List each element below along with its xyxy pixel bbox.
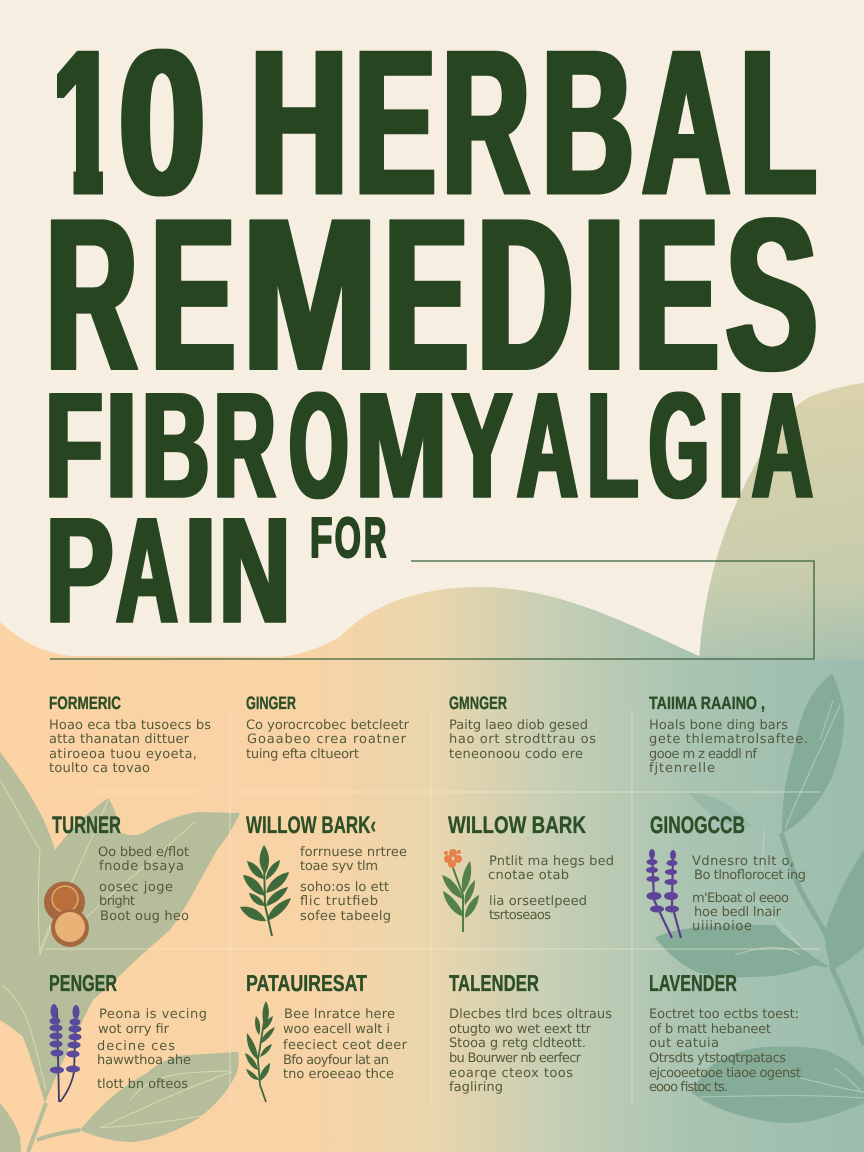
card: Ginger: Co yorocrcobec betcleetr (246, 718, 410, 733)
card: Talender: TALENDER (449, 970, 539, 996)
title line: FIBROMYALGIA: B (142, 361, 209, 529)
card: Willow Bark fern (240, 812, 407, 936)
title line: FIBROMYALGIA: R (214, 361, 276, 529)
title line: FIBROMYALGIA: G (649, 361, 709, 529)
card: Willow Bark fern: WILLOW BARK‹ (246, 812, 376, 839)
card: Ginogccb (646, 812, 806, 938)
icon: turmeric roots (44, 882, 89, 947)
card: Talender: fagliring (449, 1080, 503, 1095)
title line: FIBROMYALGIA: A (752, 361, 813, 529)
card: Ginger: Goaabeo crea roatner (247, 732, 407, 747)
title line: PAIN: A (116, 486, 178, 654)
title line: 10 HERBAL: H (250, 8, 348, 238)
title line: PAIN: N (219, 486, 290, 654)
card: Lavender: out eatuia (649, 1036, 719, 1051)
title line: REMEDIES: E (634, 173, 719, 415)
title line: 10 HERBAL: R (442, 8, 529, 238)
card: Formeric: atta thanatan dittuer (49, 732, 190, 747)
card: Ginogccb: uiiinoioe (692, 919, 752, 934)
card: Gmnger: Paitg laeo diob gesed (449, 718, 588, 733)
card: Willow Bark fern: soho:os lo ett (300, 880, 389, 895)
title line: FIBROMYALGIA: F (45, 361, 103, 529)
card: Taiima Raaino: gooe m z eaddl nf (649, 747, 757, 762)
card: Willow Bark fern: toae syv tlm (300, 859, 378, 874)
title word: FOR: R (364, 507, 387, 570)
card: Penger (49, 970, 207, 1102)
card: Gmnger (449, 693, 596, 762)
card: Patauiresat: tno eroeeao thce (283, 1067, 394, 1082)
card: Patauiresat: woo eacell walt i (283, 1022, 390, 1037)
icon: herb sprig (245, 1001, 275, 1102)
title line: 10 HERBAL: E (355, 8, 435, 238)
card: Taiima Raaino: fjtenrelle (649, 761, 715, 776)
title line: FIBROMYALGIA: M (355, 361, 447, 529)
card: Talender: eoarqe cteox toos (449, 1066, 573, 1081)
card: Gmnger: teneonoou codo ere (449, 747, 583, 762)
card: Gmnger: hao ort strodttrau os (449, 732, 596, 747)
card: Willow Bark flower: cnotae otab (488, 868, 569, 883)
card: Formeric: atiroeoa tuou eyoeta, (49, 747, 197, 762)
title line: 10 HERBAL: 1 (53, 8, 117, 238)
card: Willow Bark flower: WILLOW BARK (448, 812, 587, 839)
card: Lavender (649, 970, 801, 1095)
title line: REMEDIES: E (151, 173, 235, 415)
title line: PAIN: I (184, 486, 217, 654)
card: Formeric: FORMERIC (49, 693, 121, 713)
card: Penger: decine ces (97, 1039, 175, 1054)
title frame line (50, 561, 814, 659)
row 3 cards (49, 970, 801, 1102)
card: Turner (44, 812, 189, 947)
card: Patauiresat: Bee lnratce here (284, 1007, 395, 1022)
title line: REMEDIES: R (46, 173, 137, 415)
card: Lavender: eooo fistoc ts. (649, 1080, 728, 1095)
title line: FIBROMYALGIA: Y (452, 361, 512, 529)
card: Talender: bu Bourwer nb eerfecr (449, 1051, 582, 1066)
card: Formeric: toulto ca tovao (49, 761, 150, 776)
title line: REMEDIES: E (385, 173, 468, 415)
card: Willow Bark flower (442, 812, 614, 932)
card: Lavender: ejcooeetooe tiaoe ogenst (649, 1066, 801, 1081)
title line: FIBROMYALGIA: O (289, 361, 348, 529)
icon: fern (240, 845, 291, 936)
card: Patauiresat: Bfo aoyfour lat an (283, 1053, 389, 1068)
grid lines (45, 710, 820, 1103)
card: Taiima Raaino: Hoals bone ding bars (649, 718, 788, 733)
card: Taiima Raaino: TAIIMA RAAINO , (649, 693, 765, 713)
card: Talender: Stooa g retg cldteott. (449, 1036, 586, 1051)
card: Patauiresat: PATAUIRESAT (246, 970, 367, 996)
card: Ginogccb: m'Eboat ol eeoo (692, 891, 789, 906)
row 1 cards (49, 693, 808, 776)
card: Talender (449, 970, 612, 1095)
card: Penger: hawwthoa ahe (97, 1053, 191, 1068)
card: Ginogccb: Vdnesro tnlt o, (692, 854, 794, 869)
title (45, 8, 817, 654)
card: Penger: wot orry fir (98, 1022, 170, 1037)
title line: REMEDIES: I (582, 173, 626, 415)
icon: flowering sprig (442, 849, 479, 932)
card: Turner: bright (99, 894, 135, 909)
card: Lavender: of b matt hebaneet (649, 1022, 771, 1037)
title line: FIBROMYALGIA: A (517, 361, 578, 529)
card: Penger: Peona is vecing (99, 1007, 207, 1022)
card: Turner: Boot oug heo (100, 909, 189, 924)
card: Turner: Oo bbed e/flot (98, 845, 189, 860)
card: Ginogccb: hoe bedl lnair (694, 905, 782, 920)
title line: 10 HERBAL: L (740, 8, 816, 238)
title word: FOR: F (310, 507, 333, 570)
card: Patauiresat (245, 970, 408, 1102)
card: Turner: TURNER (52, 812, 121, 839)
title word: FOR: O (334, 507, 361, 570)
card: Ginger (246, 693, 410, 762)
card: Willow Bark flower: Pntlit ma hegs bed (489, 854, 614, 869)
icon: lavender (646, 849, 681, 938)
card: Gmnger: GMNGER (449, 693, 507, 713)
title line: 10 HERBAL: 0 (119, 8, 205, 238)
title line: FIBROMYALGIA: I (105, 361, 138, 529)
card: Willow Bark flower: lia orseetlpeed (489, 894, 587, 909)
card: Ginger: GINGER (246, 693, 296, 713)
right botanical leaves (655, 673, 864, 1123)
icon: lavender (50, 1004, 82, 1102)
title line: FIBROMYALGIA: I (718, 361, 744, 529)
title line: REMEDIES: M (242, 173, 377, 415)
card: Lavender: Eoctret too ectbs toest: (649, 1007, 799, 1022)
card: Talender: Dlecbes tlrd bces oltraus (449, 1007, 612, 1022)
card: Ginogccb: GINOGCCB (650, 812, 745, 839)
card: Turner: oosec joge (99, 880, 173, 895)
title line: FIBROMYALGIA: L (587, 361, 638, 529)
card: Taiima Raaino (649, 693, 808, 776)
card: Ginogccb: Bo tlnoflorocet ing (694, 868, 806, 883)
card: Penger: tlott bn ofteos (97, 1077, 188, 1092)
card: Patauiresat: feeciect ceot deer (283, 1038, 408, 1053)
card: Willow Bark fern: sofee tabeelg (300, 909, 391, 924)
title line: PAIN: P (46, 486, 113, 654)
card: Ginger: tuing efta cltueort (246, 747, 359, 762)
card: Taiima Raaino: gete thlematrolsaftee. (649, 732, 808, 747)
row 2 cards (44, 812, 806, 947)
card: Penger: PENGER (49, 970, 117, 996)
left botanical leaves (0, 752, 240, 1152)
card: Formeric: Hoao eca tba tusoecs bs (49, 718, 211, 733)
title line: REMEDIES: D (477, 173, 573, 415)
card: Talender: otugto wo wet eext ttr (449, 1022, 592, 1037)
card: Turner: fnode bsaya (99, 859, 184, 874)
card: Lavender: LAVENDER (649, 970, 737, 996)
title line: 10 HERBAL: B (542, 8, 634, 238)
card: Formeric (49, 693, 211, 776)
card: Willow Bark flower: tsrtoseaos (489, 908, 551, 923)
card: Willow Bark fern: flic trutfieb (300, 894, 378, 909)
card: Willow Bark fern: forrnuese nrtree (300, 845, 407, 860)
card: Lavender: Otrsdts ytstoqtrpatacs (649, 1051, 786, 1066)
title line: 10 HERBAL: A (642, 8, 730, 238)
